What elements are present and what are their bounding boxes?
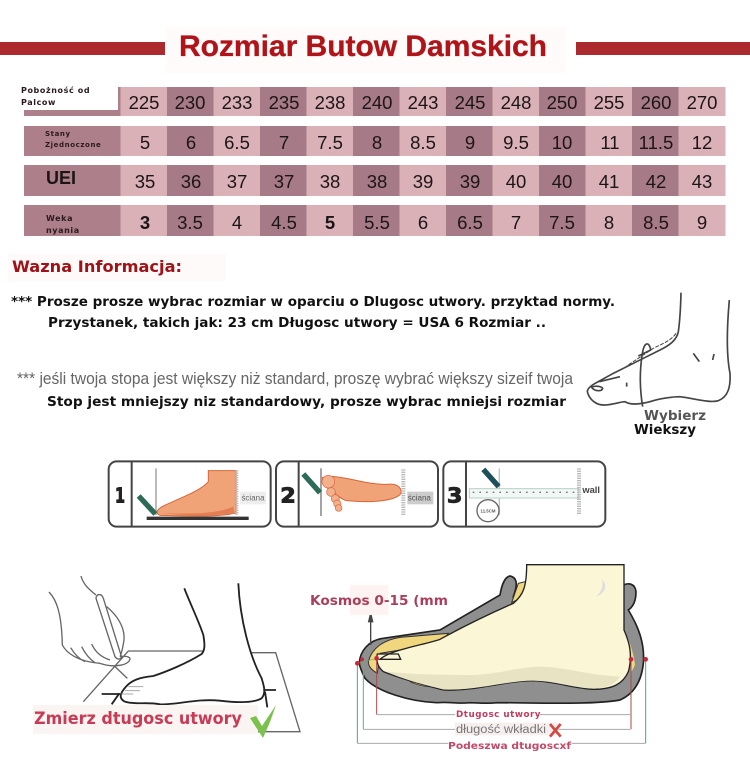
step 3 panel: 11.5CM — [481, 508, 496, 513]
step 1 panel: 1 — [115, 484, 125, 508]
size table — [17, 84, 726, 236]
text block: instructions: *** jeśli twoja stopa jest większy niż standard, proszę wybrać większy sizeif twoja — [17, 370, 574, 388]
row: EU sizes: 35 — [135, 171, 155, 192]
row: UK sizes: 6 — [418, 212, 428, 233]
row: foot length — [17, 84, 726, 116]
icon: foot in shoe outline — [587, 293, 730, 407]
row: EU sizes: 38 — [320, 171, 340, 192]
text block: instructions: Przystanek, takich jak: 23 cm Długosc utwory = USA 6 Rozmiar .. — [48, 315, 546, 331]
paper sheet — [83, 651, 300, 732]
row: foot length: 245 — [455, 92, 485, 113]
row: foot length: 240 — [362, 92, 392, 113]
heading: important information: Wazna Informacja: — [12, 257, 182, 276]
row: foot length: 260 — [641, 92, 671, 113]
row: US sizes: 7.5 — [317, 132, 343, 153]
row: US sizes: 5 — [140, 132, 150, 153]
row: UK sizes: 4 — [232, 212, 242, 233]
row: EU sizes: 39 — [413, 171, 433, 192]
row: US sizes: 7 — [279, 132, 289, 153]
illustration: measuring foot on paper — [49, 576, 300, 732]
row: US sizes: 10 — [552, 132, 572, 153]
step 2 panel: ściana — [408, 494, 431, 503]
title: Rozmiar Butow Damskich — [179, 30, 547, 63]
row: foot length: 248 — [501, 92, 531, 113]
row: EU sizes: 41 — [599, 171, 619, 192]
row: US sizes: 6 — [186, 132, 196, 153]
step 3 panel: wall — [581, 485, 600, 495]
row: foot length: 230 — [175, 92, 205, 113]
illustration: shoe cross-section — [350, 565, 648, 751]
step 3 panel: 3 — [447, 484, 462, 508]
row: US sizes: 9.5 — [503, 132, 529, 153]
row: US sizes: 8 — [372, 132, 382, 153]
yellow lining collar — [512, 581, 529, 603]
row: UK sizes: 6.5 — [457, 212, 483, 233]
row: UK sizes: 3.5 — [177, 212, 203, 233]
text block: instructions — [11, 294, 615, 410]
banner bar left — [0, 42, 165, 55]
row: EU sizes: 36 — [181, 171, 201, 192]
row: foot length: Palcow — [21, 98, 56, 107]
yellow lining heel — [623, 628, 635, 672]
row: foot length: 270 — [687, 92, 717, 113]
step 2 panel — [276, 461, 438, 527]
label: choose larger: Wiekszy — [634, 422, 696, 438]
row: foot length: 250 — [547, 92, 577, 113]
row: UK sizes: 7.5 — [549, 212, 575, 233]
row: UK sizes: 7 — [511, 212, 521, 233]
measurement guide lines — [356, 663, 359, 743]
row: US sizes: Zjednoczone — [45, 141, 101, 149]
label: sole length: Podeszwa dtugoscxf — [448, 741, 572, 752]
row: US sizes: 12 — [692, 132, 712, 153]
foot — [377, 565, 630, 690]
row: foot length: 255 — [594, 92, 624, 113]
row: US sizes: 11 — [600, 132, 620, 153]
row: EU sizes: 38 — [367, 171, 387, 192]
sole and shoe body — [359, 576, 644, 703]
row: EU sizes: 40 — [506, 171, 526, 192]
row: EU sizes: UEI — [46, 168, 76, 188]
row: EU sizes: 40 — [552, 171, 572, 192]
row: UK sizes: 3 — [140, 212, 150, 233]
row: foot length: 225 — [129, 92, 159, 113]
row: UK sizes: 5 — [325, 212, 335, 233]
label: choose larger: Wybierz — [644, 408, 706, 424]
icon: green check — [250, 705, 276, 738]
row: UK sizes: nyania — [46, 226, 80, 235]
measuring steps — [109, 461, 605, 527]
label: toe space: Kosmos 0-15 (mm — [310, 593, 448, 609]
step 2 panel: 2 — [280, 484, 296, 508]
row: EU sizes: 42 — [646, 171, 666, 192]
row: foot length: 233 — [222, 92, 252, 113]
row: EU sizes — [24, 165, 726, 196]
row: UK sizes: Weka — [46, 214, 73, 223]
text block: instructions: *** Prosze prosze wybrac rozmiar w oparciu o Dlugosc utwory. przyktad normy. — [11, 294, 615, 310]
row: UK sizes: 8 — [604, 212, 614, 233]
step 1 panel — [109, 461, 271, 527]
step 3 panel — [443, 461, 605, 527]
hand holding pencil — [49, 576, 130, 678]
row: US sizes: 6.5 — [224, 132, 250, 153]
label: foot length: Dtugosc utwory — [456, 710, 541, 720]
row: foot length: Pobożność od — [21, 85, 90, 95]
label: insole length: długość wkładki — [456, 724, 546, 736]
row: UK sizes — [24, 205, 726, 236]
row: US sizes: 11.5 — [639, 132, 673, 153]
caption: measure foot length — [33, 705, 258, 734]
heading: important information — [8, 254, 226, 281]
row: UK sizes: 4.5 — [271, 212, 297, 233]
row: foot length: 238 — [315, 92, 345, 113]
title — [166, 27, 566, 73]
row: UK sizes: 9 — [697, 212, 707, 233]
row: EU sizes: 43 — [692, 171, 712, 192]
foot and leg outline — [121, 583, 264, 704]
row: US sizes: 9 — [465, 132, 475, 153]
row: foot length: 243 — [408, 92, 438, 113]
yellow lining underfoot — [410, 682, 440, 687]
row: foot length: 235 — [269, 92, 299, 113]
arrow up from toe — [369, 613, 373, 645]
row: US sizes: Stany — [45, 130, 71, 138]
icon: red cross — [550, 724, 561, 737]
row: US sizes: 8.5 — [410, 132, 436, 153]
text block: instructions: Stop jest mniejszy niz standardowy, prosze wybrac mniejsi rozmiar — [47, 394, 566, 410]
banner bar right — [576, 42, 750, 55]
row: US sizes — [24, 126, 726, 156]
label: choose larger — [634, 408, 706, 438]
row: EU sizes: 39 — [460, 171, 480, 192]
caption: measure foot length: Zmierz dtugosc utwory — [34, 709, 242, 729]
row: UK sizes: 8.5 — [643, 212, 669, 233]
yellow lining toe — [368, 633, 448, 673]
step 1 panel: ściana — [241, 494, 265, 503]
row: EU sizes: 37 — [227, 171, 247, 192]
row: EU sizes: 37 — [274, 171, 294, 192]
row: UK sizes: 5.5 — [364, 212, 390, 233]
